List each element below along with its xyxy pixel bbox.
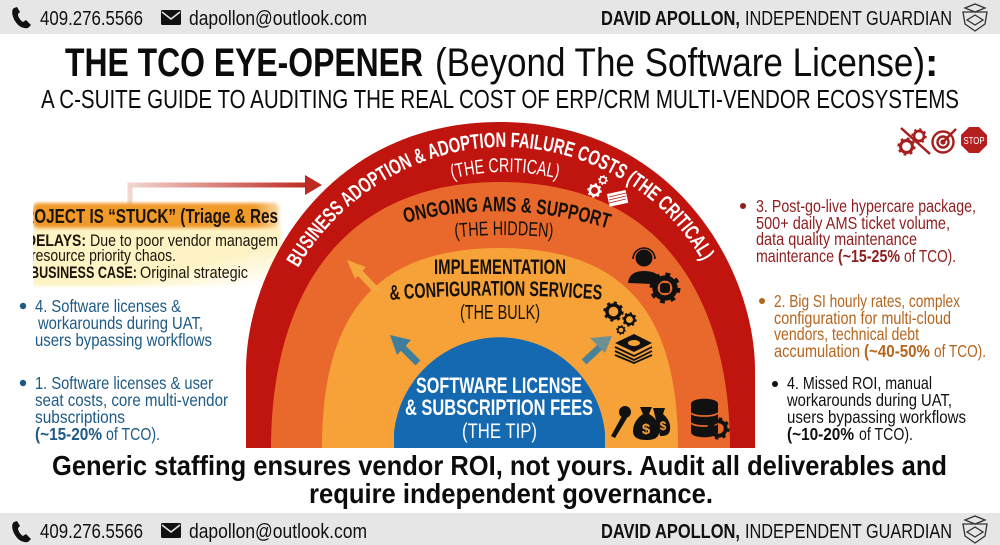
top contact bar — [0, 0, 1000, 34]
bottom takeaway — [52, 450, 947, 509]
panel: project stuck note — [13, 203, 281, 286]
left note: license and seat costs: (~15-20% — [35, 424, 102, 444]
title: : — [925, 41, 938, 85]
right note: missed ROI — [772, 373, 966, 444]
author name: DAVID APOLLON, — [601, 521, 740, 543]
panel: project stuck note: resource priority chaos. — [31, 246, 176, 265]
panel: project stuck note: Due to poor vendor managem — [90, 231, 278, 250]
heading: bulk layer: IMPLEMENTATION — [434, 256, 566, 279]
heading: critical layer: BUSINESS ADOPTION & ADOPTION FAILURE COSTS (THE CRITICAL) — [286, 132, 714, 268]
icon: target — [932, 129, 956, 152]
icon: key and money bags: $ — [642, 421, 651, 438]
icon: envelope — [161, 523, 181, 538]
heading: critical layer: (THE CRITICAL) — [451, 158, 559, 182]
panel: project stuck note: DELAYS: — [26, 231, 86, 250]
right note: hypercare: of TCO). — [904, 246, 956, 266]
icon: guardian handshake — [963, 4, 987, 31]
arrow: stuck note to critical layer — [130, 175, 322, 204]
left note: license and seat costs — [20, 373, 228, 444]
heading: hidden layer: ONGOING AMS & SUPPORT — [404, 196, 612, 228]
right note: SI rates — [759, 291, 986, 361]
icon: stack of cash — [615, 334, 652, 363]
arrow: bulk to hidden — [347, 260, 378, 292]
icon: stop sign: STOP — [964, 136, 985, 147]
layer: tip — [394, 337, 605, 448]
heading: bulk layer: (THE BULK) — [460, 302, 540, 324]
right note: hypercare: data quality maintenance — [756, 229, 917, 249]
panel: project stuck note: Original strategic — [140, 263, 248, 282]
icon: guardian handshake — [963, 516, 987, 543]
icon: phone — [12, 7, 31, 28]
author role: INDEPENDENT GUARDIAN — [745, 8, 952, 30]
heading: tip layer: SOFTWARE LICENSE — [416, 373, 582, 398]
right note: hypercare: (~15-25% — [838, 246, 900, 266]
right note: hypercare: 500+ daily AMS ticket volume, — [756, 213, 950, 233]
panel: project stuck note: BUSINESS CASE: — [30, 263, 137, 282]
heading: bulk layer — [390, 256, 602, 324]
arrow: tip to left — [390, 335, 418, 363]
right note: SI rates: accumulation — [774, 341, 860, 361]
title: (Beyond The Software License) — [435, 41, 925, 85]
author name: DAVID APOLLON, — [601, 8, 740, 30]
right note: SI rates: configuration for multi-cloud — [774, 308, 951, 328]
heading: tip layer — [405, 373, 593, 443]
right note: SI rates: vendors, technical debt — [774, 324, 919, 344]
left note: software licenses and workarounds: workarounds during UAT, — [37, 313, 203, 333]
layer: bulk — [322, 248, 678, 448]
right note: SI rates: of TCO). — [934, 341, 986, 361]
phone number: 409.276.5566 — [40, 521, 143, 543]
left note: software licenses and workarounds: users bypassing workflows — [35, 330, 212, 350]
left note: software licenses and workarounds: 4. Software licenses & — [35, 296, 181, 316]
left note: license and seat costs: 1. Software licenses & user — [35, 373, 213, 393]
email address: dapollon@outlook.com — [189, 521, 367, 543]
chart: layered cost arch — [246, 122, 755, 448]
right note: missed ROI: of TCO). — [859, 424, 913, 444]
right note: missed ROI: (~10-20% — [787, 424, 854, 444]
right note: hypercare — [740, 196, 976, 266]
heading: tip layer: (THE TIP) — [462, 420, 537, 443]
arrow: tip to right — [584, 336, 612, 362]
bottom contact bar — [0, 513, 1000, 545]
email address: dapollon@outlook.com — [189, 8, 367, 30]
left note: license and seat costs: of TCO). — [106, 424, 160, 444]
phone number: 409.276.5566 — [40, 8, 143, 30]
panel: project stuck note: PROJECT IS “STUCK” (Triage & Res — [13, 206, 278, 228]
icon: crossed gears — [899, 128, 930, 154]
icon: database and gear — [691, 399, 728, 438]
icon: gears — [605, 303, 636, 334]
icon: support agent and data gear — [628, 248, 678, 301]
layer: hidden — [271, 182, 730, 448]
left note: license and seat costs: subscriptions — [35, 407, 125, 427]
title: THE TCO EYE-OPENER — [65, 41, 423, 85]
left note: license and seat costs: seat costs, core multi-vendor — [35, 390, 228, 410]
left note: software licenses and workarounds — [20, 296, 212, 350]
bottom takeaway: require independent governance. — [309, 478, 713, 509]
right note: SI rates: (~40-50% — [864, 341, 930, 361]
heading: bulk layer: & CONFIGURATION SERVICES — [390, 280, 602, 300]
heading: tip layer: & SUBSCRIPTION FEES — [405, 395, 593, 420]
right note: missed ROI: workarounds during UAT, — [786, 390, 952, 410]
layer: critical — [246, 122, 755, 448]
heading: hidden layer: (THE HIDDEN) — [455, 221, 552, 242]
icon: envelope — [161, 10, 181, 25]
icon: phone — [12, 521, 31, 542]
icons: gears, target, stop sign — [899, 127, 987, 154]
right note: missed ROI: 4. Missed ROI, manual — [787, 373, 932, 393]
right note: hypercare: mainterance — [756, 246, 834, 266]
icon: white gears and cash — [588, 176, 628, 207]
icon: key and money bags — [611, 406, 670, 440]
author role: INDEPENDENT GUARDIAN — [745, 521, 952, 543]
title — [65, 41, 938, 85]
right note: missed ROI: users bypassing workflows — [787, 407, 966, 427]
icon: key and money bags: $ — [660, 419, 667, 433]
